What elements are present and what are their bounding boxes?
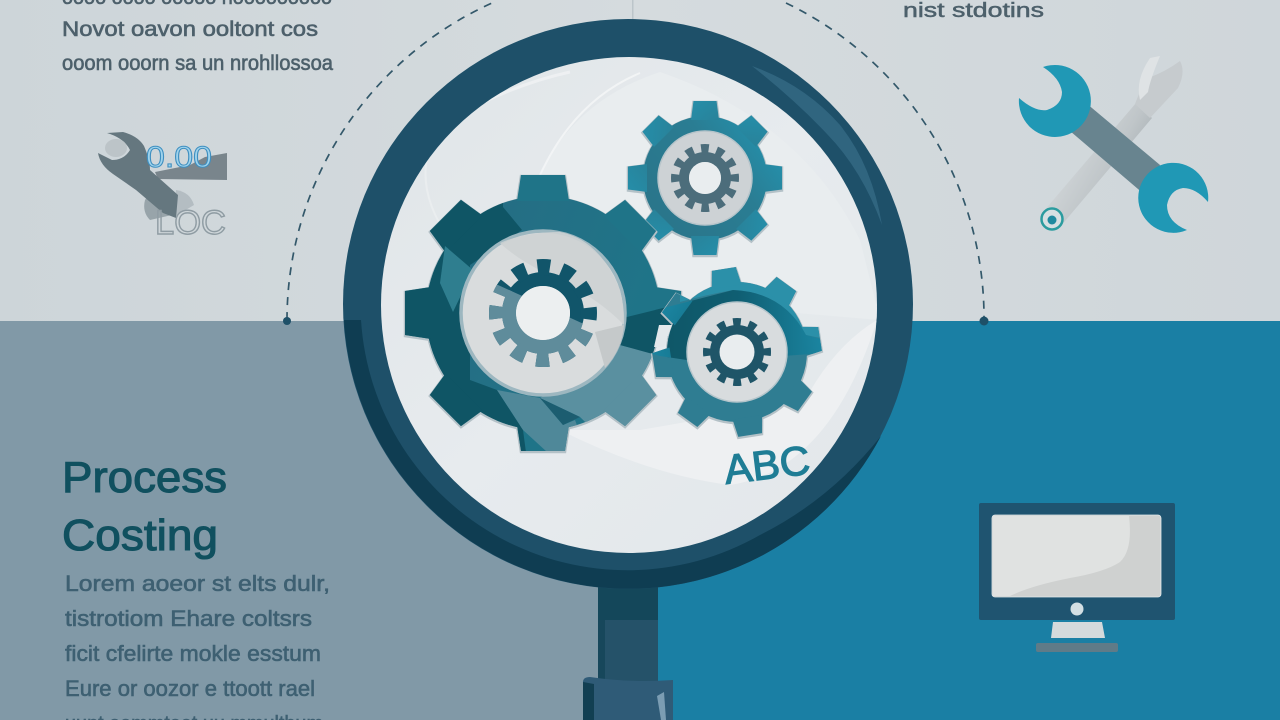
background: top light panel: [0, 0, 1280, 321]
icon: wrench and screwdriver: [1019, 56, 1208, 233]
background: lower left panel: [0, 321, 640, 720]
text block: top right: nist stdotins: [903, 0, 1044, 22]
icon: grey wrench with chart: 0.00: [146, 141, 212, 174]
text: heading Process Costing: Costing: [62, 511, 218, 560]
text block: lower left paragraph: Lorem aoeor st elts dulr,: [65, 571, 330, 596]
gear hub: [658, 131, 752, 225]
gear: large central gear: [405, 175, 681, 452]
wrench lower head: [1138, 163, 1208, 233]
gear: top right small gear: [628, 101, 782, 256]
magnifying glass: [343, 19, 913, 589]
text block: lower left paragraph: ficit cfelirte mokle esstum: [65, 641, 321, 666]
text block: top left: [62, 0, 333, 75]
text block: top left: Novot oavon ooltont cos: [62, 18, 318, 41]
gear: lower right gear: [652, 267, 822, 438]
gear hub: [687, 302, 787, 402]
text: ABC label: ABC: [721, 437, 812, 493]
screwdriver: [1042, 56, 1183, 230]
text block: lower left paragraph: [65, 571, 330, 720]
inner gear dark part: [497, 267, 589, 359]
text block: lower left paragraph: Eure or oozor e ttoott rael: [65, 676, 315, 701]
icon: grey wrench with chart: LOC: [155, 204, 226, 242]
magnifying glass handle: [583, 580, 673, 720]
text: heading Process Costing: Process: [62, 453, 227, 502]
gear hub: [461, 231, 625, 395]
text block: lower left paragraph: tistrotiom Ehare coltsrs: [65, 606, 312, 631]
dashed arc connecting the lower panels: [283, 3, 988, 326]
glass ring: [343, 19, 913, 589]
wrench upper head: [1019, 65, 1091, 137]
wrench handle: [1070, 103, 1160, 195]
background: lower right panel: [640, 321, 1280, 720]
text block: top left: ooom ooorn sa un nrohllossoa: [62, 52, 333, 75]
icon: grey wrench with chart: [98, 132, 227, 242]
text: heading Process Costing: [62, 453, 227, 560]
icon: computer monitor: [979, 503, 1175, 652]
glass lens: [380, 56, 880, 554]
inner gear light part: [497, 267, 589, 359]
